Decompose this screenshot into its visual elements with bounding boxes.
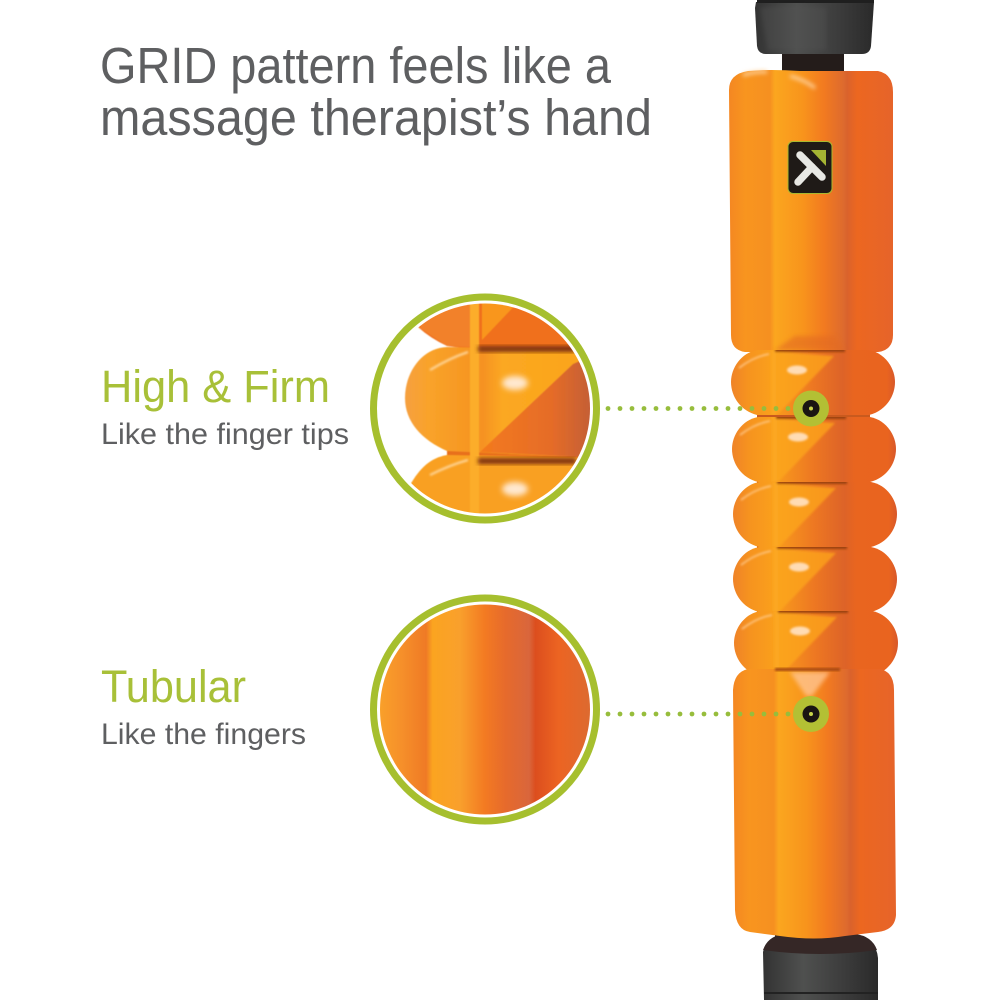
marker: Tubular [793, 696, 829, 732]
label: High & Firm: High & Firm [101, 361, 330, 412]
core between lobes [757, 345, 870, 675]
zoom circle: High & Firm texture [374, 295, 607, 525]
lower tube [733, 668, 896, 938]
title [100, 37, 652, 146]
dotted leader: High & Firm [606, 406, 790, 411]
upper tube [729, 70, 893, 352]
label: Tubular: Tubular [101, 661, 246, 712]
label: Tubular: Like the fingers [101, 718, 306, 751]
logo badge [788, 142, 832, 194]
dotted leader: Tubular [606, 712, 790, 716]
label: High & Firm [101, 361, 349, 451]
zoom circle: Tubular texture [374, 598, 596, 821]
groove backing [446, 450, 578, 458]
marker: High & Firm [793, 390, 829, 426]
top end cap [755, 0, 874, 74]
upper lobe [418, 304, 572, 350]
massage roller product [729, 0, 898, 1000]
middle lobe [404, 346, 579, 456]
title: GRID pattern feels like a [100, 37, 612, 94]
lower lobe [410, 454, 578, 514]
title: massage therapist’s hand [100, 89, 652, 146]
bottom end cap [763, 930, 878, 1000]
lobes of the GRID pattern [731, 348, 898, 676]
label: Tubular [101, 661, 306, 751]
label: High & Firm: Like the finger tips [101, 418, 349, 451]
